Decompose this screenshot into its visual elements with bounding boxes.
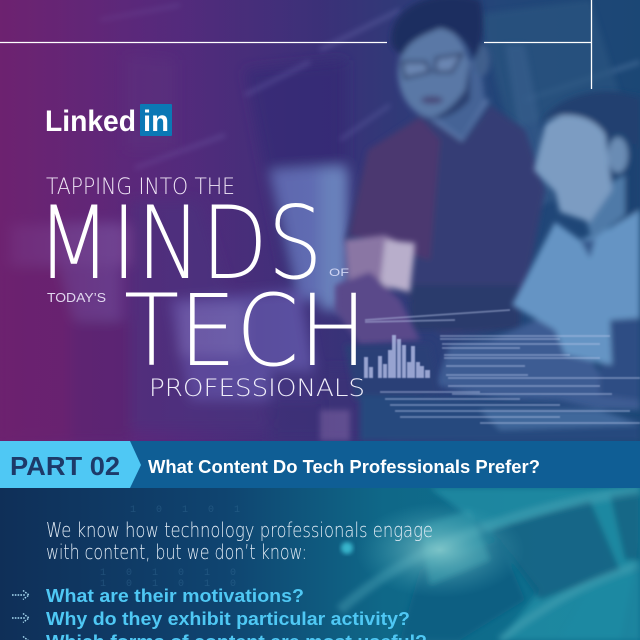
background panel behind men	[484, 4, 614, 118]
laptop and desk	[320, 345, 640, 441]
glow spots	[368, 510, 512, 591]
bar chart on screen	[364, 335, 430, 378]
title	[37, 175, 367, 402]
part 02 banner	[0, 441, 640, 488]
shirt	[345, 105, 545, 335]
top frame lines	[0, 0, 592, 89]
title word: tech: TECH	[124, 274, 367, 389]
title word: of: OF	[329, 267, 349, 279]
question 1	[12, 588, 303, 602]
man in glasses	[345, 0, 545, 335]
faint binary digits: 1 0 1 0 1 0	[100, 579, 243, 590]
banner heading: What Content Do Tech Professionals Prefer?	[148, 457, 540, 477]
neck and face	[440, 59, 486, 137]
faint binary digits: 1 0 1 0 1	[130, 505, 247, 516]
title word: professionals: PROFESSIONALS	[149, 374, 365, 402]
mouth	[421, 96, 443, 104]
intro text: with content, but we don’t know:	[46, 540, 307, 564]
monitor shapes	[16, 67, 355, 420]
left tint overlay	[6, 202, 250, 437]
man in t-shirt	[435, 91, 640, 410]
intro text: We know how technology professionals engage	[46, 518, 433, 542]
faint binary digits	[100, 506, 240, 586]
hair	[391, 0, 483, 58]
diagonal light streaks	[146, 10, 640, 165]
hero photo background	[0, 0, 640, 441]
intro text	[46, 518, 433, 564]
title word: today's: TODAY’S	[47, 290, 106, 305]
data lines overlay	[365, 310, 640, 423]
t-shirt	[512, 210, 640, 365]
neck	[580, 175, 625, 240]
title word: minds: MINDS	[37, 184, 323, 302]
LinkedIn logo: in	[143, 105, 169, 138]
face	[534, 112, 612, 222]
arm and body	[435, 310, 640, 410]
LinkedIn logo: Linked	[45, 105, 136, 138]
title line: tapping into the: TAPPING INTO THE	[46, 175, 235, 200]
hand and mug	[335, 235, 420, 345]
icon: dotted arrow	[12, 590, 29, 600]
faint binary digits: 1 0 1 0 1 0	[100, 568, 243, 579]
glasses	[402, 54, 462, 78]
hair	[548, 92, 627, 134]
icon: dotted arrow	[22, 636, 29, 640]
back of head and neck	[604, 135, 638, 218]
icon: dotted arrow	[12, 614, 29, 622]
banner bar	[0, 441, 640, 488]
part number: PART 02	[10, 453, 120, 481]
question 3	[22, 634, 426, 640]
banner part tag	[0, 441, 141, 488]
lower background	[0, 488, 640, 640]
teal screen panels	[340, 488, 640, 640]
question 1: What are their motivations?	[46, 585, 304, 606]
question list	[12, 585, 427, 640]
question 2: Why do they exhibit particular activity?	[46, 608, 410, 629]
